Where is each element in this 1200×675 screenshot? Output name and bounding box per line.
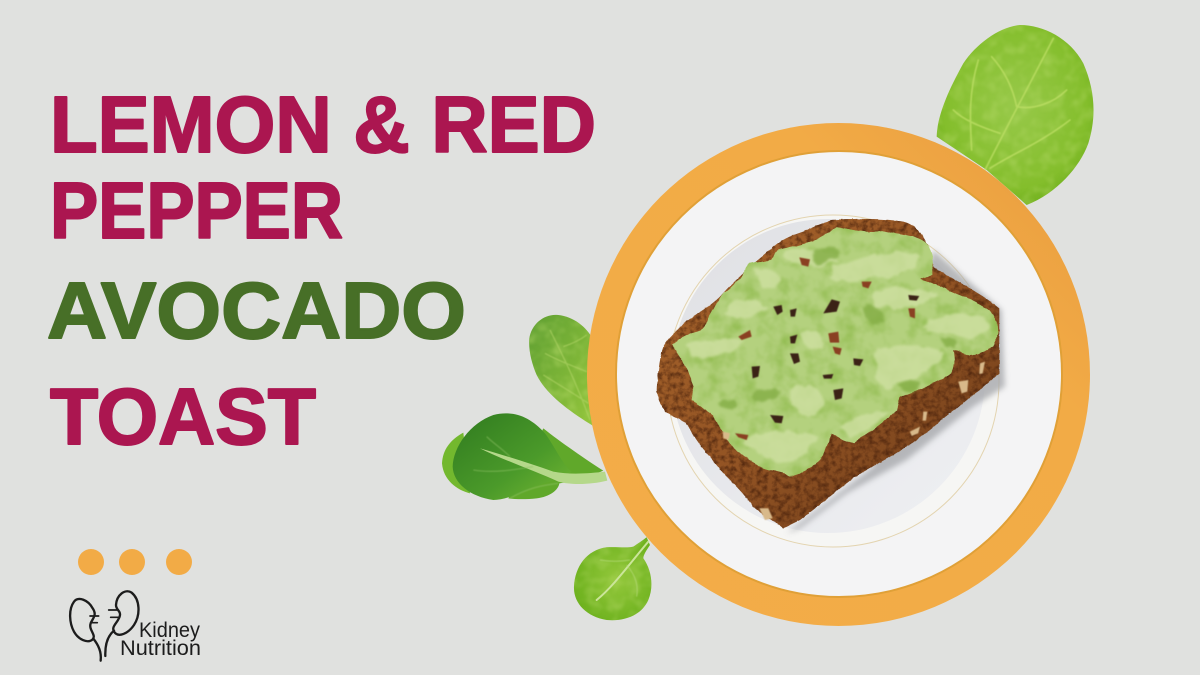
avocado spread bbox=[672, 227, 1000, 475]
logo text: nutrition: Nutrition bbox=[120, 637, 201, 660]
plate well bbox=[671, 219, 985, 533]
logo: kidney nutrition bbox=[70, 591, 201, 661]
title line: toast: TOAST bbox=[50, 372, 316, 461]
leaf main blade bbox=[453, 413, 572, 500]
orange ring bbox=[587, 123, 1090, 626]
leaf back lobe bbox=[508, 428, 603, 499]
avocado highlights bbox=[683, 249, 990, 462]
title line: pepper: PEPPER bbox=[50, 166, 343, 255]
red pepper flakes bbox=[752, 295, 919, 423]
leaf stem bbox=[480, 448, 607, 484]
icon: kidneys bbox=[70, 591, 139, 661]
icon: three dots bbox=[78, 549, 192, 575]
logo text: kidney: Kidney bbox=[139, 619, 200, 642]
avocado darker patches bbox=[718, 247, 955, 409]
plate well ring bbox=[667, 215, 999, 547]
leaf: bottom bbox=[574, 537, 651, 620]
pale seeds on crust bbox=[723, 362, 985, 520]
title bbox=[47, 80, 596, 461]
white plate bbox=[616, 151, 1062, 597]
leaf: top right bbox=[937, 25, 1094, 205]
leaf: upper left bbox=[529, 315, 593, 426]
title line: lemon and red: LEMON & RED bbox=[50, 80, 596, 169]
toast bread bbox=[657, 219, 999, 528]
leaf: left bbox=[442, 413, 607, 500]
avocado toast bbox=[657, 219, 1005, 533]
leaf back blade bbox=[442, 433, 470, 493]
title line: avocado: AVOCADO bbox=[47, 266, 466, 355]
plate rim bbox=[616, 151, 1062, 597]
toast shadow bbox=[787, 250, 1005, 533]
